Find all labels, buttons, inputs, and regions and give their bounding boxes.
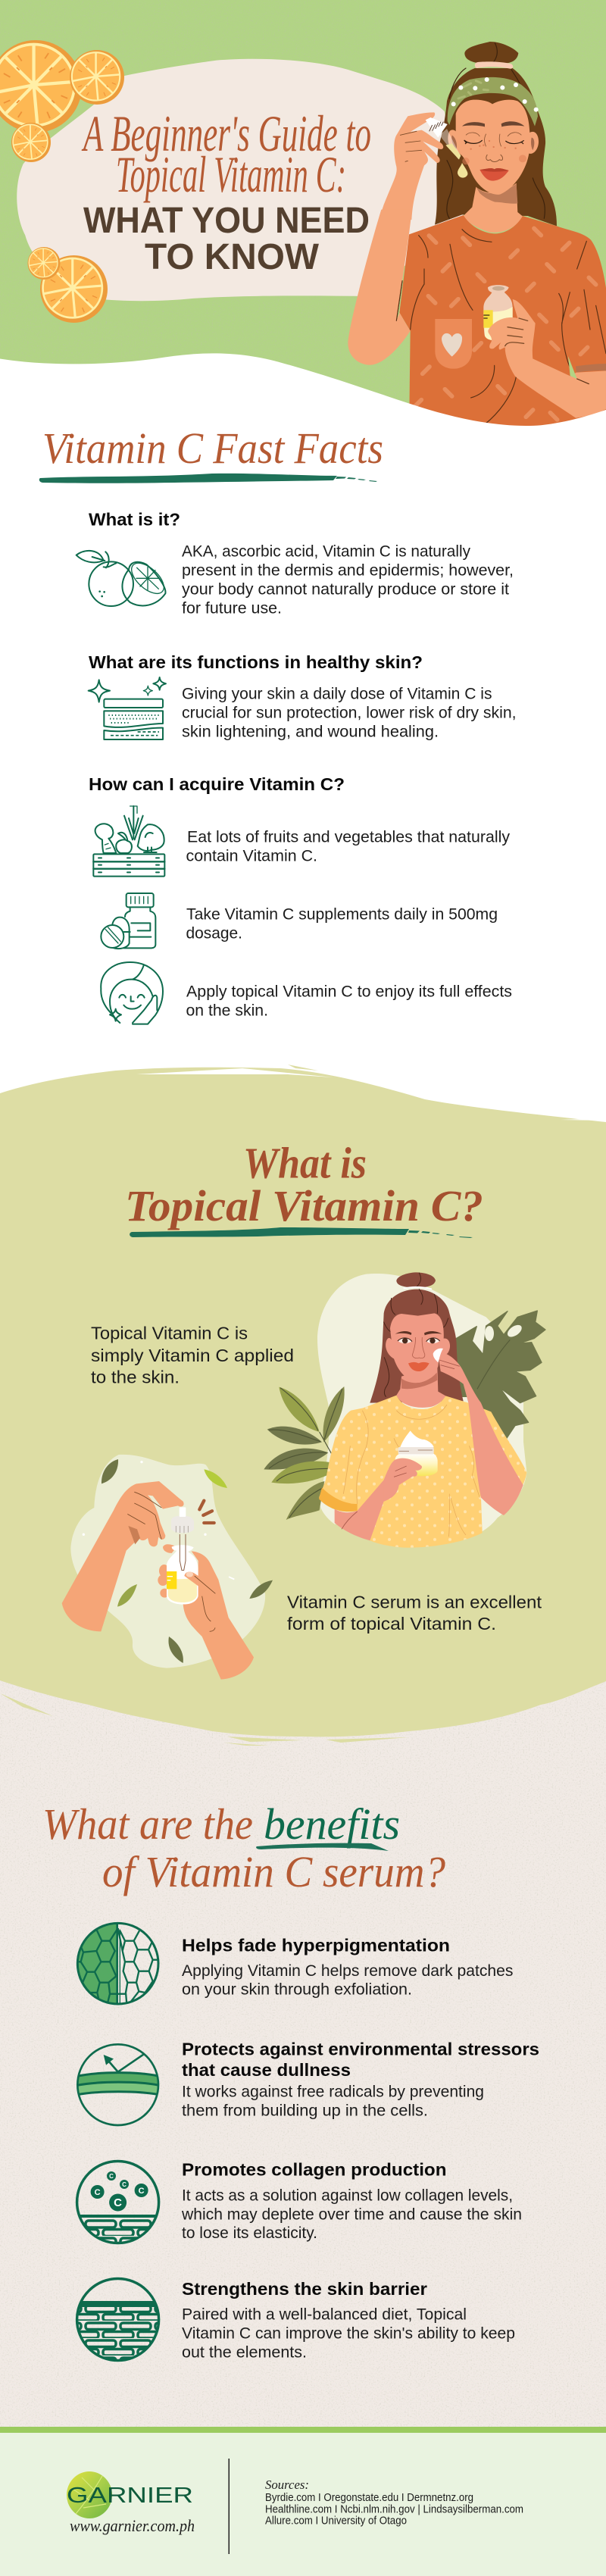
- title: bold lines: WHAT YOU NEED: [83, 201, 370, 241]
- sleeve cuff: [576, 364, 606, 373]
- lips: [479, 168, 509, 181]
- fact 1 text: AKA, ascorbic acid, Vitamin C is naturally: [182, 542, 470, 560]
- white specks: [83, 1461, 235, 1580]
- brows: [395, 1331, 442, 1335]
- icon: skin layers: [89, 677, 166, 739]
- hair tie: [404, 1287, 432, 1289]
- fact 1 heading: What is it?: [89, 510, 180, 530]
- sources: Sources:: [265, 2478, 309, 2492]
- sources: Byrdie.com I Oregonstate.edu I Dermnetnz.org: [265, 2492, 473, 2504]
- shirt fold lines: [396, 230, 606, 424]
- benefit 2 text: [182, 2039, 539, 2119]
- hero cream brush blob: [17, 59, 464, 301]
- fact 2 text: crucial for sun protection, lower risk of dry skin,: [182, 705, 517, 722]
- benefit 1 text: Helps fade hyperpigmentation: [182, 1935, 450, 1955]
- illustration: hands with serum dropper: [62, 1455, 273, 1680]
- small leaves: [279, 1387, 320, 1432]
- benefit 4 text: out the elements.: [182, 2343, 307, 2361]
- raised arm: [348, 210, 412, 365]
- acquire text 3: [186, 983, 512, 1020]
- brush underline: [256, 1843, 389, 1851]
- serum bottle: [483, 285, 513, 340]
- illustration: woman head with dropper: [379, 42, 557, 233]
- benefit 3 text: which may deplete over time and cause the skin: [181, 2206, 522, 2223]
- benefit 3 text: to lose its elasticity.: [182, 2224, 317, 2242]
- icon: orange slices top: [0, 40, 124, 162]
- hand and forearm: [488, 299, 606, 418]
- eyelids and lashes: [466, 133, 521, 146]
- acquire text 3: Apply topical Vitamin C to enjoy its full effects: [186, 983, 512, 1000]
- shirt: [319, 1396, 526, 1548]
- neck shadow: [476, 184, 517, 204]
- lower arm: [335, 1458, 422, 1540]
- logo: Garnier: [67, 2471, 193, 2518]
- finger lines: [400, 131, 422, 161]
- heading: What is: What is: [243, 1138, 367, 1188]
- hair strands: [447, 68, 545, 218]
- hair bun: [464, 42, 518, 63]
- ears shading: [451, 135, 534, 150]
- benefit 4 text: [182, 2279, 515, 2361]
- heading: Topical Vitamin C?: Topical Vitamin C?: [125, 1181, 483, 1230]
- acquire text 2: dosage.: [186, 924, 242, 943]
- acquire text 3: on the skin.: [186, 1002, 268, 1020]
- divider: [229, 2459, 230, 2554]
- pale blob: [317, 1274, 526, 1537]
- brush wisps: [0, 1064, 409, 1746]
- title: script lines: Topical Vitamin C:: [116, 145, 346, 203]
- icon: smiling face with hand: [101, 962, 163, 1024]
- hair bun: [396, 1272, 436, 1287]
- right hand and arm: [183, 1551, 254, 1680]
- hair tie: [475, 61, 513, 69]
- headband dots: [451, 77, 539, 112]
- icon: supplements: [101, 893, 155, 949]
- fact 2 text: [182, 686, 517, 741]
- shirt dashes: [414, 228, 596, 420]
- heading: What are the benefits: What are the: [42, 1799, 253, 1849]
- benefit 1 text: [182, 1935, 514, 1999]
- benefit 1 text: Applying Vitamin C helps remove dark patches: [182, 1962, 514, 1980]
- fact 1 text: your body cannot naturally produce or store it: [182, 580, 509, 598]
- text: serum description: Vitamin C serum is an excellent: [287, 1593, 542, 1612]
- panel: benefits: [42, 1799, 539, 2364]
- hair: [370, 1290, 464, 1403]
- leaves: [102, 1459, 118, 1483]
- acquire text 1: [186, 828, 511, 864]
- hero green background: [0, 0, 606, 485]
- white brush wisps: [136, 1068, 606, 1121]
- dropper: [426, 117, 448, 138]
- shirt: [399, 215, 606, 434]
- cotton pad: [433, 1349, 443, 1362]
- fact 3 heading: How can I acquire Vitamin C?: [89, 774, 345, 794]
- text: topical definition: Topical Vitamin C is: [91, 1323, 248, 1343]
- brush underline: [130, 1227, 473, 1238]
- title: script lines: [81, 105, 371, 203]
- spark lines: [199, 1501, 214, 1523]
- panel: cream benefits background: [0, 1652, 606, 2432]
- headband: [448, 77, 538, 127]
- left arm and hand: [62, 1481, 184, 1631]
- monstera leaf: [456, 1311, 545, 1441]
- eyes: [398, 1338, 439, 1343]
- benefit 2 text: that cause dullness: [182, 2060, 351, 2080]
- fact 1 text: [182, 542, 514, 617]
- fact 2 text: skin lightening, and wound healing.: [182, 724, 439, 741]
- heading: Vitamin C Fast Facts: Vitamin C Fast Facts: [42, 424, 383, 473]
- bottle: [167, 1545, 198, 1605]
- icon: collagen cells: C: [95, 2188, 101, 2197]
- lips: [408, 1362, 430, 1371]
- freckles and blush: [462, 140, 526, 164]
- benefit 1 text: on your skin through exfoliation.: [182, 1981, 412, 1999]
- icon: hexagon skin cells: [76, 1922, 160, 2005]
- green brush section shape: [0, 1068, 606, 1737]
- neck: [396, 1366, 445, 1408]
- fact 2 text: Giving your skin a daily dose of Vitamin C is: [182, 686, 492, 703]
- illustration: woman with cream jar: [264, 1272, 545, 1548]
- face: [386, 1313, 450, 1383]
- cream jar: [395, 1453, 438, 1476]
- website url: www.garnier.com.ph: [70, 2516, 195, 2535]
- nose: [486, 155, 503, 162]
- pocket: [435, 319, 472, 369]
- icon: collagen cells: C: [109, 2173, 114, 2180]
- heading: What are the benefits: [42, 1799, 400, 1849]
- benefit 3 text: Promotes collagen production: [182, 2160, 447, 2180]
- brush underline: [39, 474, 377, 483]
- acquire text 1: Eat lots of fruits and vegetables that naturally: [187, 828, 511, 846]
- benefit 3 text: [181, 2160, 522, 2242]
- panel: hero header: [0, 0, 606, 486]
- text: topical definition: simply Vitamin C applied: [91, 1346, 294, 1365]
- pocket heart: [442, 333, 462, 357]
- hand on jar: [384, 1458, 422, 1502]
- white wave divider: [0, 353, 606, 486]
- shirt fold lines: [343, 1405, 479, 1537]
- title: script lines: A Beginner's Guide to: [81, 105, 371, 162]
- acquire text 1: contain Vitamin C.: [186, 847, 317, 864]
- illustration: woman body with bottle: [348, 210, 606, 434]
- benefit 2 text: Protects against environmental stressors: [182, 2039, 539, 2059]
- fact 1 text: for future use.: [182, 599, 282, 617]
- pale blob: [70, 1455, 265, 1668]
- back fingers: [158, 1544, 176, 1598]
- icon: collagen cells: C: [114, 2196, 122, 2209]
- title: bold lines: TO KNOW: [145, 237, 320, 277]
- icon: orange slices bottom: [27, 247, 108, 323]
- icon: collagen cells: [76, 2161, 163, 2249]
- eyebrows: [462, 121, 524, 127]
- icon: crate of vegetables: [93, 806, 164, 877]
- fact 1 text: present in the dermis and epidermis; however,: [182, 561, 514, 579]
- heading: of Vitamin C serum: of Vitamin C serum?: [102, 1847, 445, 1896]
- gap under sleeve: [568, 356, 577, 379]
- icon: brick skin barrier: [76, 2279, 163, 2364]
- sources: Healthline.com I Ncbi.nlm.nih.gov | Lindsaysilberman.com: [265, 2504, 523, 2516]
- benefit 3 text: It acts as a solution against low collagen levels,: [182, 2187, 513, 2204]
- footer top bar: [0, 2427, 606, 2433]
- panel: footer: [0, 2427, 606, 2576]
- neck: [464, 183, 523, 233]
- sources: [265, 2478, 523, 2528]
- panel: fast facts: [77, 510, 517, 1024]
- acquire text 2: Take Vitamin C supplements daily in 500mg: [186, 906, 498, 923]
- benefit 2 text: It works against free radicals by preventing: [182, 2083, 484, 2100]
- sleeve cuff: [319, 1487, 358, 1512]
- panel: what is topical vitamin C: [0, 1064, 606, 1746]
- title: bold lines: [83, 201, 370, 277]
- benefit 4 text: Strengthens the skin barrier: [182, 2279, 427, 2299]
- fact 2 heading: What are its functions in healthy skin?: [89, 652, 423, 672]
- raised hand: [379, 112, 443, 220]
- text: serum description: form of topical Vitamin C.: [287, 1614, 496, 1633]
- raised arm: [438, 1352, 523, 1515]
- icon: citrus fruit: [77, 551, 169, 606]
- benefit 4 text: Paired with a well-balanced diet, Topical: [182, 2306, 467, 2323]
- heading: What are the benefits: benefits: [264, 1799, 400, 1849]
- text: topical definition: to the skin.: [91, 1367, 180, 1386]
- finger lines: [505, 318, 528, 346]
- sources: Allure.com I University of Otago: [265, 2515, 407, 2528]
- icon: protective skin layers with arrow: [76, 2044, 161, 2125]
- logo: Garnier: GARNIER: [67, 2484, 193, 2508]
- face: [448, 100, 539, 195]
- long hair: [435, 68, 557, 226]
- benefit 2 text: them from building up in the cells.: [182, 2102, 428, 2119]
- text: topical definition: [91, 1323, 294, 1386]
- footer background: [0, 2433, 606, 2576]
- dropper: [180, 1534, 186, 1571]
- acquire text 2: [186, 906, 498, 943]
- benefit 4 text: Vitamin C can improve the skin's ability to keep: [182, 2324, 515, 2342]
- icon: collagen cells: C: [139, 2187, 145, 2196]
- text: serum description: [287, 1593, 542, 1633]
- nose: [412, 1337, 425, 1358]
- icon: collagen cells: C: [122, 2181, 127, 2188]
